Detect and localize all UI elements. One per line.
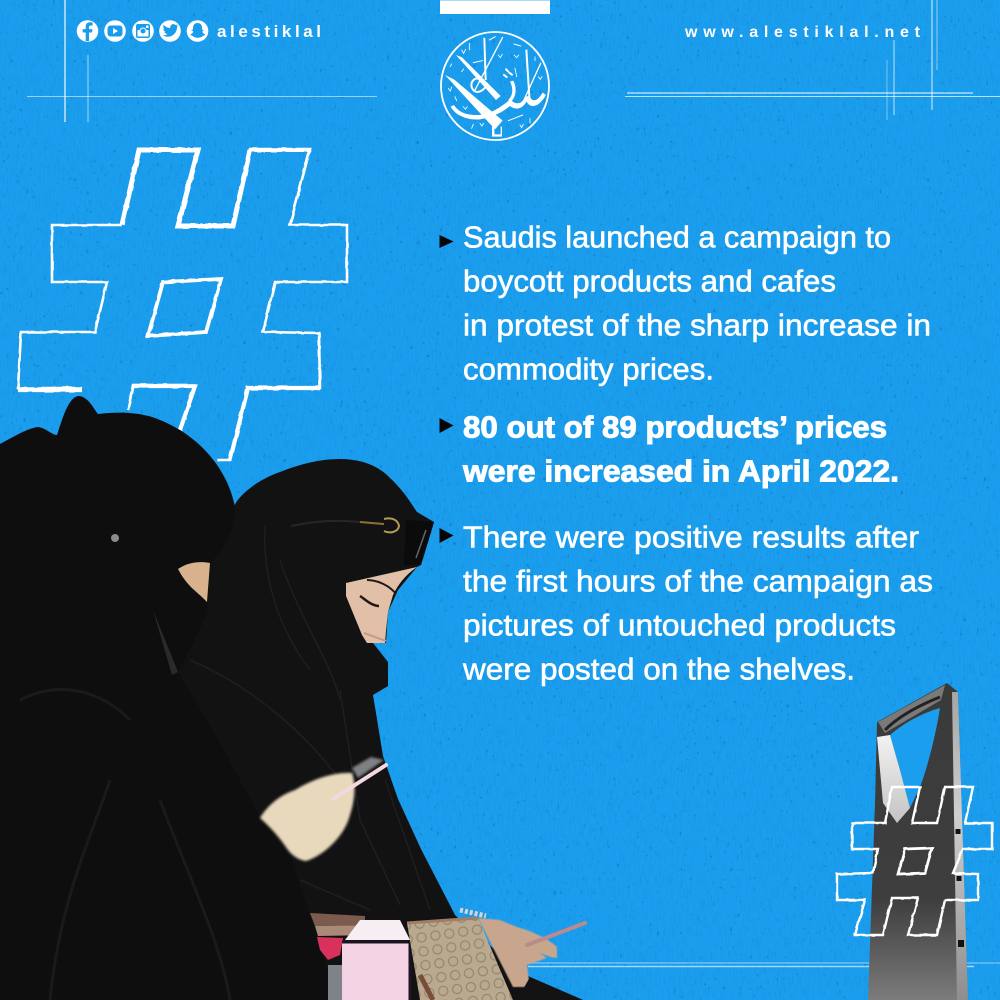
rear woman silhouette xyxy=(120,459,583,1000)
decorative lines: top right xyxy=(625,0,1000,120)
icon: instagram xyxy=(132,20,154,42)
tower sky opening xyxy=(890,708,940,808)
decorative lines: bottom right xyxy=(528,963,1000,966)
flower xyxy=(317,937,343,960)
second phone xyxy=(527,923,585,945)
text block: commodity prices. xyxy=(463,352,714,386)
tower sail xyxy=(877,735,910,823)
icon: snapchat xyxy=(187,20,208,42)
lips shade xyxy=(364,633,386,641)
arrow xyxy=(440,528,454,543)
large hashtag outline xyxy=(18,149,347,460)
hand xyxy=(260,773,354,861)
highlighted text block xyxy=(462,410,899,488)
decorative lines: top left xyxy=(27,0,377,122)
text block: boycott products and cafes xyxy=(463,264,836,298)
tower xyxy=(868,683,968,1000)
highlighted text block: 80 out of 89 products’ prices xyxy=(463,410,887,444)
veil highlight xyxy=(153,610,178,675)
fabric folds xyxy=(190,525,430,910)
icon: facebook xyxy=(77,20,98,42)
tower windows xyxy=(956,829,964,947)
magazines xyxy=(310,913,410,940)
text block: in protest of the sharp increase in xyxy=(463,308,931,342)
icon: twitter xyxy=(159,20,181,42)
inner square of hashtag xyxy=(148,279,221,336)
grey cloth xyxy=(328,965,343,1000)
social media icons xyxy=(77,20,208,42)
bullet 2 xyxy=(440,410,899,488)
tower light edge xyxy=(952,692,968,1000)
text block xyxy=(462,520,933,686)
arrow xyxy=(440,418,454,433)
handbag and items xyxy=(310,910,585,1000)
bullet 3 xyxy=(440,520,933,686)
text block xyxy=(463,220,931,386)
top white bar xyxy=(440,0,550,14)
bracelet xyxy=(460,910,486,916)
social handle: alestiklal xyxy=(217,22,321,41)
website url: www.alestiklal.net xyxy=(684,24,921,41)
eye and eyebrow xyxy=(360,580,396,606)
front woman silhouette xyxy=(0,396,386,1000)
text block: Saudis launched a campaign to xyxy=(463,220,891,254)
sunglasses xyxy=(291,518,434,565)
hand holding phone xyxy=(478,918,557,987)
icon: youtube xyxy=(104,20,126,42)
small hashtag outline xyxy=(837,787,992,935)
face xyxy=(346,567,417,643)
highlighted text block: were increased in April 2022. xyxy=(462,454,899,488)
text block: There were positive results after xyxy=(463,520,919,554)
text block: pictures of untouched products xyxy=(463,608,896,642)
icon: logo emblem xyxy=(441,32,549,140)
fabric folds xyxy=(20,690,230,1000)
pink box xyxy=(342,942,410,1000)
text block: were posted on the shelves. xyxy=(462,652,855,686)
patterned bag xyxy=(407,918,513,1000)
bullet 1 xyxy=(440,220,931,386)
arrow xyxy=(440,235,454,248)
veil pin xyxy=(111,534,119,542)
phone xyxy=(333,757,386,799)
text block: the first hours of the campaign as xyxy=(463,564,933,598)
tower bridge xyxy=(878,685,945,733)
sleeve xyxy=(517,977,583,1000)
eye area xyxy=(178,562,210,602)
